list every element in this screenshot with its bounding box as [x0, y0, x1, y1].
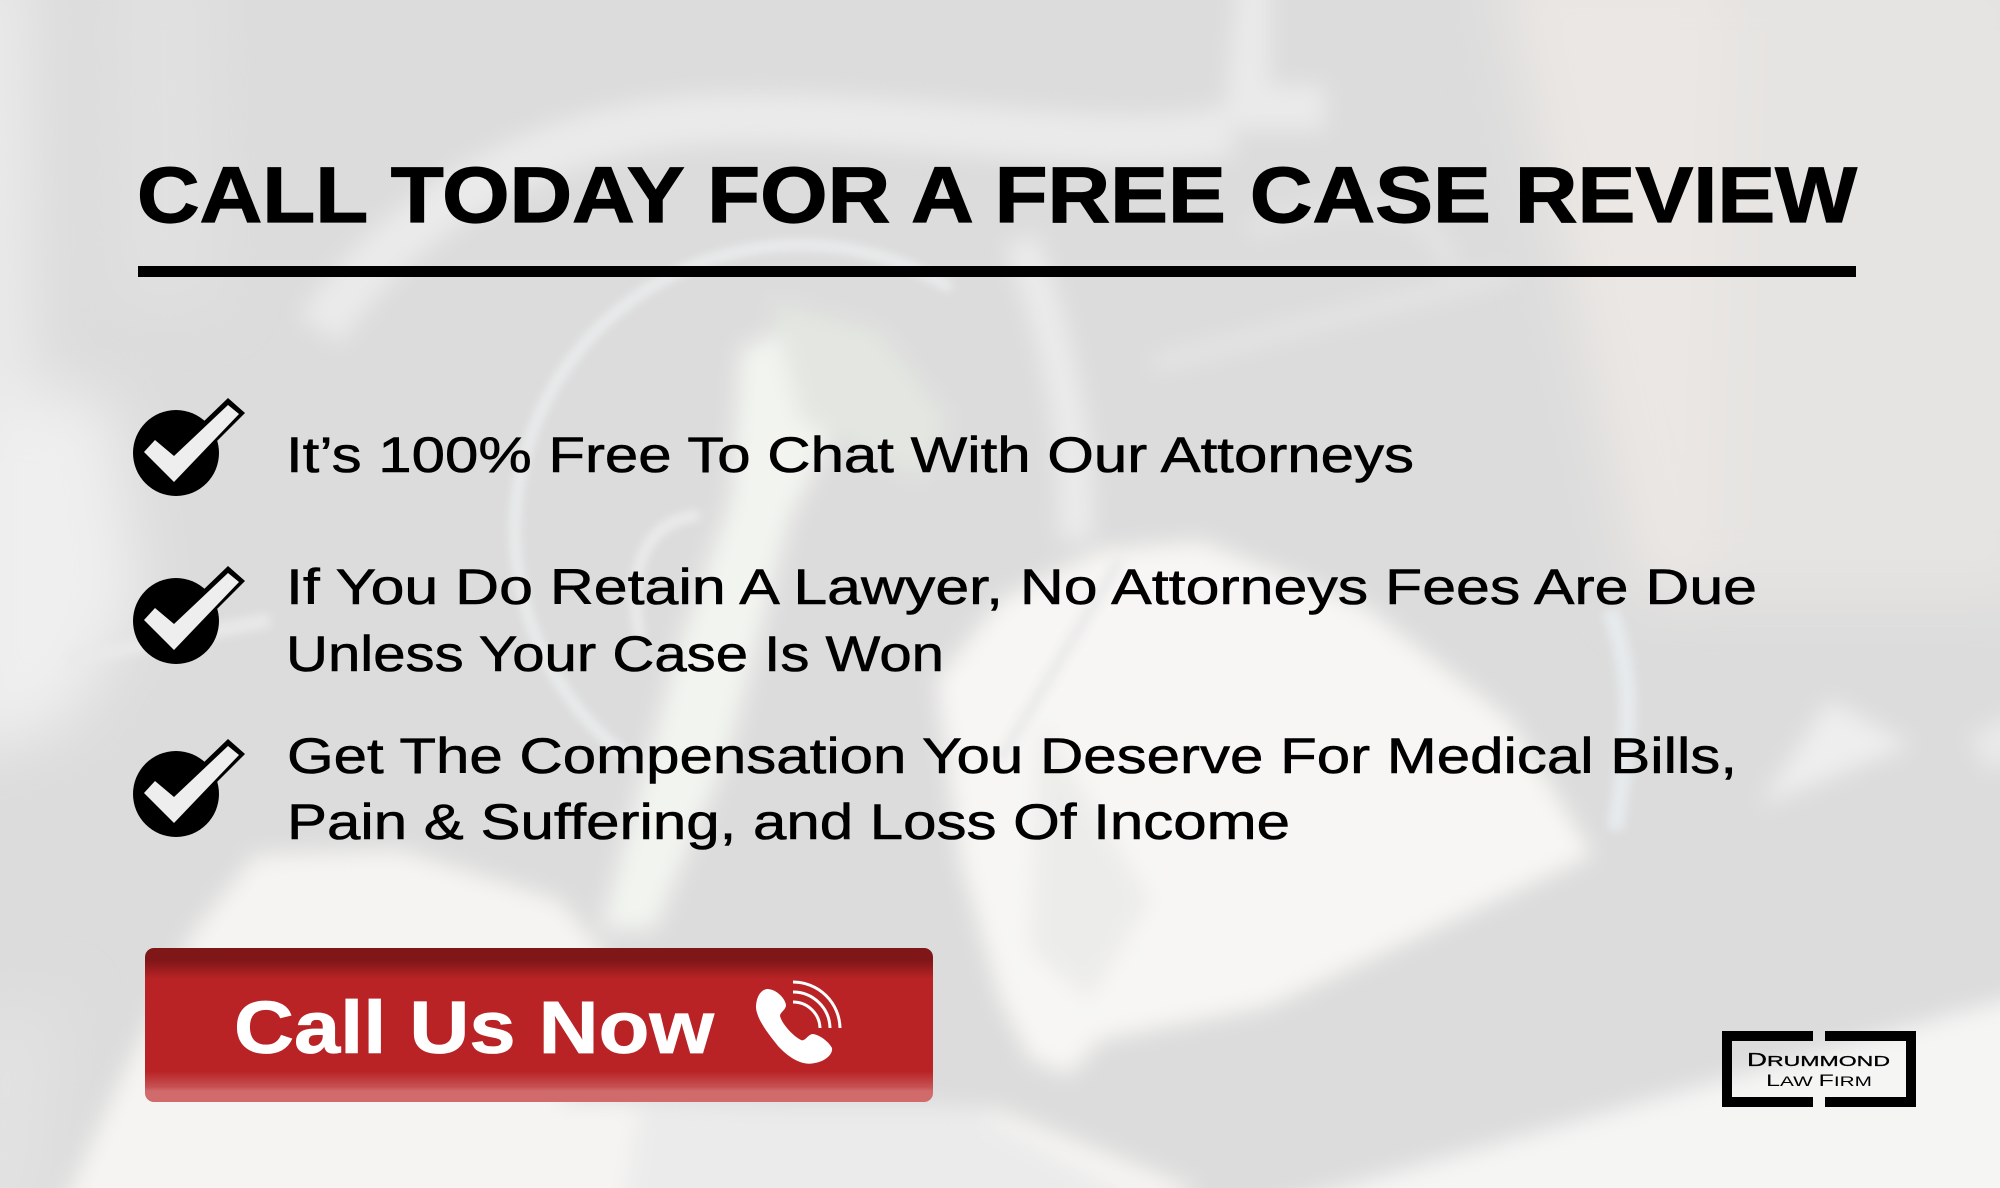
right hand: [936, 541, 1593, 1075]
center streak and hub: [600, 320, 850, 930]
right side reflections: [1759, 700, 1912, 806]
list item 2: [133, 559, 1757, 682]
logo name: D RUMMOND: [1747, 1050, 1890, 1070]
left hand: [51, 850, 1200, 1188]
icon: check mark 2: [133, 566, 245, 664]
icon: check mark 3: [133, 739, 245, 837]
list item 3: [133, 728, 1737, 850]
title rule: [138, 266, 1856, 277]
text: item 3: [287, 728, 1737, 850]
thin inner ring: [403, 133, 1197, 927]
text: item 3: Get The Compensation You Deserve For Medical Bills,: [287, 728, 1737, 784]
logo: Drummond Law Firm: [1722, 1031, 1916, 1107]
text: item 2: Unless Your Case Is Won: [286, 626, 944, 682]
title: CALL TODAY FOR A FREE CASE REVIEW: [137, 150, 1857, 239]
icon: check mark 1: [133, 398, 245, 496]
text: item 2: If You Do Retain A Lawyer, No Attorneys Fees Are Due: [286, 559, 1757, 615]
icon: phone: [756, 982, 840, 1064]
logo subtitle: L AW F IRM: [1766, 1071, 1872, 1090]
text: item 1: It’s 100% Free To Chat With Our Attorneys: [286, 427, 1414, 483]
call-to-action button: [145, 948, 933, 1102]
text: item 2: [286, 559, 1757, 682]
text: item 3: Pain & Suffering, and Loss Of Income: [287, 794, 1290, 850]
button label: Call Us Now: [234, 986, 714, 1069]
outer wheel rim light: [320, 119, 1230, 330]
list item 1: [133, 398, 1414, 496]
bottom right light band: [1191, 990, 2000, 1188]
